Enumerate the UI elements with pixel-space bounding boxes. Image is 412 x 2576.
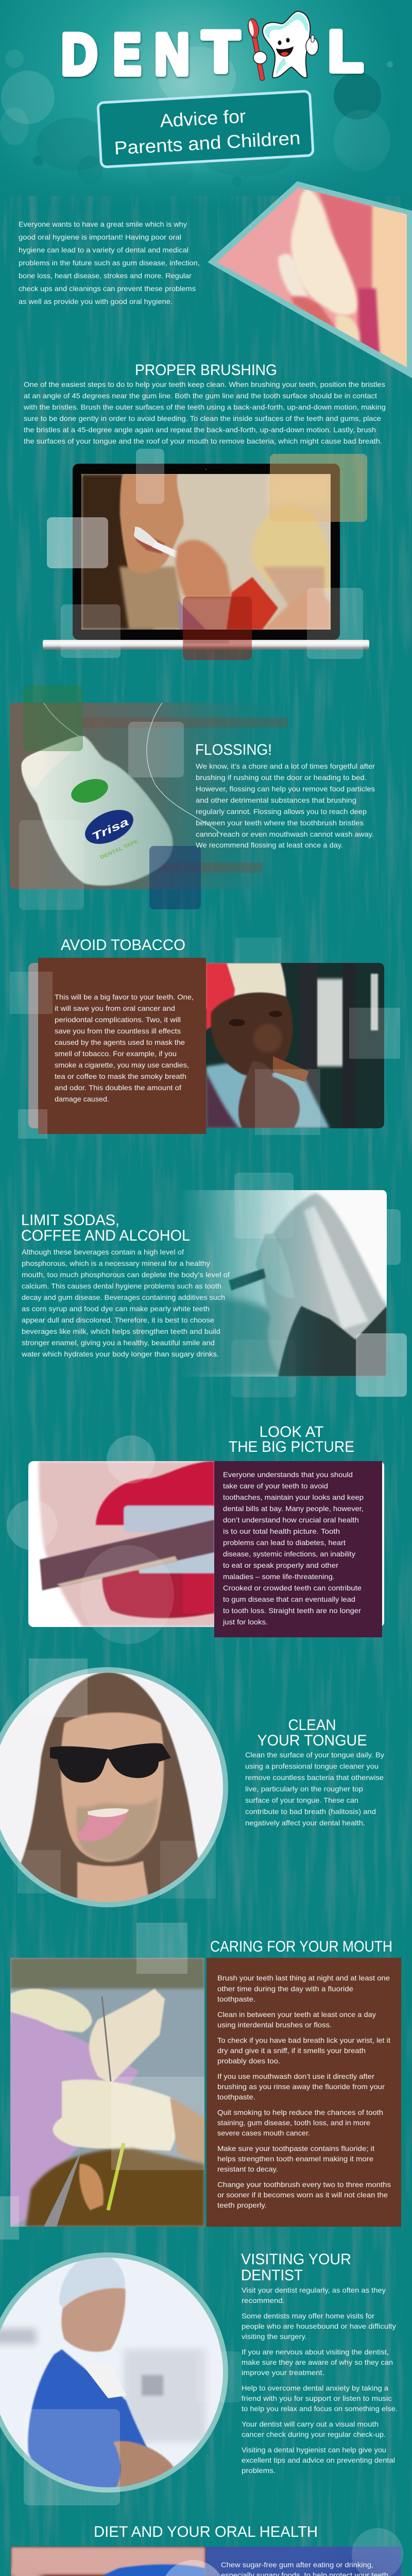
- text block: limit sodas: [21, 1248, 230, 1358]
- text panel: caring for your mouth: To check if you have bad breath lick your wrist, let it: [217, 2036, 390, 2044]
- photo: man sticking out tongue: [0, 1667, 228, 1907]
- text block: introduction: Everyone wants to have a great smile which is why: [19, 220, 187, 228]
- text panel: big picture: don’t understand how crucial oral health: [223, 1516, 359, 1524]
- heading: visiting your dentist: DENTIST: [241, 2267, 303, 2284]
- text block: limit sodas: mouth, too much phosphorous can deplete the body’s level of: [22, 1270, 230, 1279]
- text block: introduction: problems in the future such as gum disease, infection,: [19, 259, 200, 267]
- overlay squares: [0, 1923, 204, 2258]
- text block: introduction: check ups and cleanings can prevent these problems: [19, 284, 196, 293]
- heading: limit sodas: LIMIT SODAS,: [21, 1212, 119, 1229]
- heading: limit sodas: [21, 1212, 190, 1244]
- heading: caring for your mouth: CARING FOR YOUR MOUTH: [210, 1938, 392, 1955]
- text block: limit sodas: as corn syrup and food dye can make pearly white teeth: [22, 1304, 210, 1313]
- section: diet and your oral health: [0, 2523, 407, 2576]
- text block: proper brushing: One of the easiest steps to do to help your teeth keep clean. When brushing your teeth, position the bristles: [24, 380, 385, 388]
- text block: visiting your dentist: make sure they are aware of why so they can: [242, 2358, 393, 2366]
- heading: clean your tongue: [258, 1717, 367, 1749]
- heading: avoid tobacco: AVOID TOBACCO: [61, 937, 185, 954]
- text block: visiting your dentist: excellent tips and advice on preventing dental: [242, 2456, 395, 2464]
- text block: flossing: We recommend flossing at least once a day.: [196, 841, 343, 849]
- text panel: caring for your mouth: dry and give it a sniff, if it smells your breath: [217, 2046, 366, 2055]
- text panel: tobacco: and odor. This doubles the amount of: [55, 1083, 181, 1092]
- text panel: tobacco: [38, 958, 206, 1134]
- text block: flossing: cannot reach or even mouthwash cannot wash away.: [196, 830, 374, 838]
- text block: proper brushing: the bristles at a 45-degree angle again and repeat the back-and-forth, up-and-down motion. Lastly, brush: [24, 426, 376, 434]
- heading: proper brushing: PROPER BRUSHING: [135, 362, 277, 379]
- text panel: big picture: maladies – some life-threatening.: [223, 1572, 335, 1581]
- text block: visiting your dentist: people who are housebound or have difficulty: [242, 2322, 396, 2330]
- overlay squares behind photo: [231, 1173, 401, 1397]
- text block: introduction: [19, 220, 200, 306]
- text panel: tobacco: smoke a cigarette, you may use candies,: [55, 1061, 189, 1069]
- text panel: big picture: to gum disease that can eventually lead: [223, 1595, 355, 1603]
- heading: limit sodas: COFFEE AND ALCOHOL: [21, 1227, 190, 1244]
- text block: clean your tongue: Clean the surface of your tongue daily. By: [245, 1751, 384, 1759]
- text block: diet: [221, 2561, 391, 2576]
- title: DENTAL: [61, 19, 363, 87]
- text panel: big picture: toothaches, maintain your looks and keep: [223, 1493, 364, 1501]
- text block: flossing: brushing if rushing out the door or heading to bed.: [196, 773, 367, 782]
- overlay squares: [18, 1658, 216, 1899]
- text block: proper brushing: sure to be done gently in order to avoid bleeding. To clean the inside surfaces of the teeth and gums, place: [24, 414, 381, 422]
- text panel: caring for your mouth: helps strengthen tooth enamel making it more: [217, 2155, 373, 2163]
- text block: visiting your dentist: Help to overcome dental anxiety by taking a: [242, 2384, 388, 2392]
- text block: visiting your dentist: Some dentists may offer home visits for: [242, 2312, 374, 2320]
- text panel: tobacco: it will save you from oral cancer and: [55, 1004, 175, 1012]
- text block: flossing: between your teeth where the toothbrush bristles: [196, 819, 364, 827]
- subtitle line 2: Parents and Children: [114, 127, 301, 159]
- text block: visiting your dentist: [242, 2286, 398, 2475]
- title: DENTAL: D: [61, 22, 97, 87]
- text panel: caring for your mouth: other time during the day with a fluoride: [217, 1985, 353, 1993]
- heading: visiting your dentist: VISITING YOUR: [241, 2251, 351, 2268]
- overlay squares: [10, 938, 400, 1139]
- text panel: big picture: Everyone understands that you should: [223, 1470, 353, 1479]
- section: visiting your dentist: [0, 2251, 398, 2505]
- text block: proper brushing: with the bristles. Brush the outer surfaces of the teeth using a back-and-forth, up-and-down motion, making: [23, 403, 386, 411]
- text panel: caring for your mouth: severe cases mouth cancer.: [217, 2129, 310, 2137]
- heading: diet and your oral health: DIET AND YOUR ORAL HEALTH: [94, 2523, 318, 2540]
- text block: visiting your dentist: cancer check during your regular check-up.: [242, 2430, 386, 2438]
- photo: dental examination: [10, 1958, 204, 2227]
- overlay squares: [47, 449, 367, 660]
- photo: lips biting chocolate: [28, 1461, 384, 1627]
- text panel: caring for your mouth: Change your toothbrush every two to three months: [217, 2180, 391, 2189]
- text block: visiting your dentist: If you are nervous about visiting the dentist,: [242, 2348, 389, 2356]
- photo: floss container: [10, 685, 288, 910]
- text block: clean your tongue: contribute to bad breath (halitosis) and: [245, 1807, 376, 1816]
- text block: visiting your dentist: to help you relax and focus on something else.: [242, 2404, 398, 2413]
- text block: clean your tongue: remove countless bacteria that otherwise: [245, 1773, 384, 1782]
- text panel: caring for your mouth: using interdental brushes or floss.: [217, 2021, 332, 2029]
- text panel: tobacco: periodontal complications. Two, it will: [55, 1015, 181, 1024]
- text panel: caring for your mouth: Quit smoking to help reduce the chances of tooth: [217, 2108, 383, 2116]
- section: flossing: [10, 685, 375, 910]
- text panel: caring for your mouth: resistant to decay.: [217, 2165, 278, 2173]
- text panel: big picture: disease, systemic infections, an inability: [223, 1550, 355, 1558]
- text block: flossing: [196, 762, 375, 849]
- title: DENTAL: E: [113, 22, 141, 87]
- heading: look at the big picture: [229, 1423, 354, 1455]
- text block: flossing: We know, it’s a chore and a lot of times forgetful after: [196, 762, 375, 770]
- text block: flossing: and other detrimental substances that brushing: [196, 796, 356, 804]
- text block: proper brushing: the surfaces of your tongue and the roof of your mouth to remove bacteria, which might cause bad breath.: [24, 437, 382, 445]
- section: big picture: [7, 1423, 384, 1644]
- text panel: big picture: to tooth loss. Straight teeth are no longer: [223, 1606, 361, 1615]
- text panel: caring for your mouth: teeth properly.: [217, 2201, 267, 2209]
- photo: elderly woman smoking: [28, 963, 384, 1128]
- subtitle line 1: Advice for: [159, 106, 246, 131]
- photo: floss container: Trisa: [90, 816, 131, 843]
- text block: introduction: as well as provide you with good oral hygiene.: [19, 297, 173, 306]
- text panel: caring for your mouth: Make sure your toothpaste contains fluoride; it: [217, 2144, 374, 2153]
- title: DENTAL: N: [154, 22, 190, 87]
- text block: limit sodas: water which hydrates your body longer than sugary drinks.: [21, 1350, 219, 1358]
- title: DENTAL: L: [328, 19, 363, 83]
- text panel: big picture: dental bills at bay. Many people, however,: [223, 1504, 364, 1513]
- text panel: caring for your mouth: probably does too.: [217, 2057, 280, 2065]
- overlay square: lower right: [356, 1333, 407, 1397]
- text panel: diet: [205, 2547, 407, 2576]
- text block: visiting your dentist: recommend.: [242, 2296, 285, 2304]
- text panel: caring for your mouth: If you use mouthwash don’t use it directly after: [217, 2072, 374, 2080]
- text block: flossing: regularly cannot. Flossing allows you to reach deep: [196, 807, 367, 816]
- photo: floss container: DENTAL TAPE: [99, 839, 140, 860]
- text block: clean your tongue: using a professional tongue cleaner you: [245, 1762, 379, 1770]
- text panel: big picture: [214, 1461, 382, 1637]
- heading: flossing: FLOSSING!: [195, 741, 272, 758]
- text panel: tobacco: caused by the agents used to mask the: [55, 1038, 185, 1046]
- text panel: tobacco: smell of tobacco. For example, if you: [55, 1049, 177, 1058]
- text panel: caring for your mouth: [207, 1958, 401, 2227]
- text block: clean your tongue: surface of your tongue. These can: [245, 1796, 358, 1804]
- text block: limit sodas: stronger enamel, giving you a healthy, beautiful smile and: [22, 1338, 215, 1347]
- text panel: tobacco: damage caused.: [55, 1095, 109, 1103]
- text panel: tobacco: save you from the countless ill effects: [55, 1027, 181, 1035]
- text panel: big picture: take care of your teeth to avoid: [223, 1482, 328, 1490]
- text panel: tobacco: This will be a big favor to your teeth. One,: [55, 993, 194, 1001]
- text block: visiting your dentist: improve your treatment.: [242, 2368, 324, 2377]
- heading: visiting your dentist: [241, 2251, 351, 2284]
- text panel: big picture: to eat or speak properly and other: [223, 1561, 338, 1569]
- text block: diet: Chew sugar-free gum after eating or drinking,: [221, 2561, 373, 2569]
- icon: cartoon tooth with toothbrush: [247, 11, 318, 78]
- heading: look at the big picture: LOOK AT: [260, 1423, 323, 1440]
- section: caring for your mouth: [0, 1923, 401, 2258]
- heading: look at the big picture: THE BIG PICTURE: [229, 1438, 354, 1455]
- text panel: big picture: is to our total health picture. Tooth: [223, 1527, 340, 1535]
- text panel: caring for your mouth: toothpaste.: [217, 1995, 255, 2003]
- text panel: big picture: just for looks.: [222, 1618, 268, 1626]
- text block: flossing: However, flossing can help you remove food particles: [196, 785, 375, 793]
- text panel: caring for your mouth: Brush your teeth last thing at night and at least one: [217, 1974, 390, 1982]
- photo: teeth with blue gel: [10, 2547, 205, 2576]
- heading: clean your tongue: YOUR TONGUE: [258, 1732, 367, 1749]
- text block: proper brushing: [23, 380, 386, 445]
- text panel: big picture: Crooked or crowded teeth can contribute: [223, 1584, 362, 1592]
- overlay squares: [19, 685, 201, 910]
- text block: limit sodas: calcium. This causes dental hygiene problems such as tooth: [22, 1282, 221, 1290]
- heading: clean your tongue: CLEAN: [288, 1717, 336, 1734]
- text block: visiting your dentist: Your dentist will carry out a visual mouth: [242, 2420, 379, 2428]
- text block: visiting your dentist: friend with you for support or listen to music: [242, 2394, 392, 2402]
- text block: proper brushing: at an angle of 45 degrees near the gum line. Both the gum line and the tooth surface should be in contact: [24, 392, 377, 400]
- text block: visiting your dentist: problems.: [242, 2466, 276, 2475]
- photo: dentist: [0, 2252, 232, 2494]
- text block: limit sodas: appear dull and discolored. Therefore, it is best to choose: [22, 1316, 214, 1324]
- title: DENTAL: T: [202, 20, 239, 84]
- photo: close-up of teeth in a diamond frame: [208, 181, 412, 378]
- text block: visiting your dentist: Visiting a dental hygienist can help give you: [242, 2446, 386, 2454]
- text block: limit sodas: beverages like milk, which helps strengthen teeth and build: [22, 1327, 220, 1335]
- section: clean your tongue: [0, 1658, 384, 1907]
- text block: introduction: hygiene can lead to a variety of dental and medical: [19, 246, 188, 254]
- illustration: laptop with brushing photo: [43, 449, 369, 660]
- text block: visiting your dentist: Visit your dentist regularly, as often as they: [242, 2286, 386, 2294]
- section: proper brushing: [23, 362, 386, 445]
- section: avoid tobacco: [10, 937, 400, 1139]
- text block: limit sodas: phosphorous, which is a necessary mineral for a healthy: [22, 1259, 210, 1267]
- text block: introduction: good oral hygiene is important! Having poor oral: [19, 233, 181, 241]
- text panel: caring for your mouth: staining, gum disease, tooth loss, and in more: [217, 2119, 370, 2127]
- text block: limit sodas: Although these beverages contain a high level of: [22, 1248, 184, 1256]
- text panel: caring for your mouth: or sooner if it becomes worn as it will not clean the: [217, 2191, 388, 2199]
- photo: woman drinking soda: [179, 1190, 387, 1377]
- text panel: tobacco: tea or coffee to mask the smoky breath: [55, 1072, 186, 1080]
- text block: introduction: bone loss, heart disease, strokes and more. Regular: [19, 272, 192, 280]
- overlay ellipses: [7, 1435, 174, 1644]
- text block: limit sodas: decay and gum disease. Beverages containing additives such: [22, 1293, 225, 1301]
- section: limit sodas: [21, 1173, 407, 1397]
- text block: clean your tongue: [245, 1751, 384, 1827]
- subtitle badge: [98, 91, 313, 167]
- text block: clean your tongue: live, particularly on the rougher top: [245, 1785, 363, 1793]
- text panel: big picture: problems can lead to diabetes, heart: [223, 1538, 346, 1547]
- text block: visiting your dentist: visiting the surgery.: [242, 2332, 307, 2341]
- overlay ellipses: [0, 2528, 403, 2576]
- overlay squares: [24, 2351, 242, 2505]
- text block: clean your tongue: negatively affect your dental health.: [245, 1819, 365, 1827]
- text panel: caring for your mouth: brushing as you rinse away the fluoride from your: [217, 2082, 385, 2091]
- text panel: caring for your mouth: Clean in between your teeth at least once a day: [217, 2010, 376, 2019]
- text panel: caring for your mouth: toothpaste.: [217, 2093, 255, 2101]
